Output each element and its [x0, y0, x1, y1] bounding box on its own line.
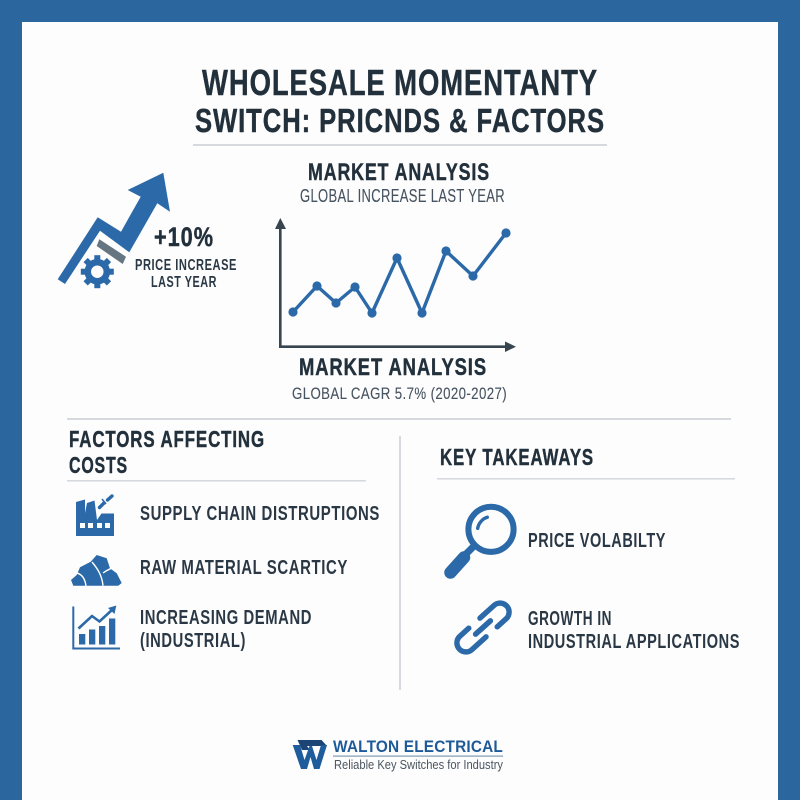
icon: magnifying glass — [450, 507, 514, 572]
heading: market analysis bottom: MARKET ANALYSIS — [299, 354, 487, 381]
title: WHOLESALE MOMENTANTY — [202, 62, 598, 103]
heading: factors: FACTORS AFFECTING — [69, 426, 265, 452]
heading: factors: COSTS — [69, 452, 128, 478]
heading: key takeaways: KEY TAKEAWAYS — [440, 444, 594, 470]
panel: factors affecting costs — [67, 426, 380, 652]
text: increasing demand: INCREASING DEMAND — [140, 607, 312, 629]
icon: grey bar — [97, 239, 126, 264]
heading: market analysis bottom — [292, 354, 507, 403]
icon: rising arrow — [58, 173, 170, 284]
line chart — [275, 218, 516, 352]
stat label: LAST YEAR — [151, 274, 217, 291]
chart line — [293, 233, 506, 313]
text: price volatility: PRICE VOLABILTY — [528, 530, 666, 552]
text: supply chain: SUPPLY CHAIN DISTRUPTIONS — [140, 503, 380, 525]
icon: raw material rocks — [71, 555, 122, 586]
heading: market analysis bottom: GLOBAL CAGR 5.7% (2020-2027) — [292, 384, 507, 403]
text: growth: GROWTH IN — [528, 608, 612, 630]
chart axes — [275, 218, 516, 352]
text: growth — [528, 608, 740, 653]
heading: factors — [69, 426, 265, 478]
panel: price increase callout — [58, 173, 237, 291]
text: increasing demand — [140, 607, 312, 652]
heading: market analysis top: GLOBAL INCREASE LAST YEAR — [300, 186, 505, 206]
title: SWITCH: PRICNDS & FACTORS — [195, 102, 605, 139]
icon: factory with broken chain — [76, 496, 114, 536]
stat: +10%: +10% — [154, 222, 214, 252]
stat label: PRICE INCREASE — [135, 257, 237, 274]
text: increasing demand: (INDUSTRIAL) — [140, 630, 246, 652]
title — [195, 62, 605, 139]
brand name: WALTON ELECTRICAL — [333, 737, 503, 756]
icon: demand bar chart — [73, 606, 120, 648]
stat label — [135, 257, 237, 291]
text: raw material: RAW MATERIAL SCARTICY — [140, 557, 348, 579]
icon: W mark — [293, 740, 327, 769]
tagline: Reliable Key Switches for Industry — [334, 758, 504, 772]
panel: key takeaways — [437, 444, 740, 656]
icon: gear — [81, 255, 114, 288]
chart points — [288, 228, 511, 318]
icon: chain link — [453, 599, 513, 656]
heading: market analysis top — [300, 159, 505, 206]
heading: market analysis top: MARKET ANALYSIS — [308, 159, 490, 186]
logo: Walton Electrical — [293, 737, 504, 772]
